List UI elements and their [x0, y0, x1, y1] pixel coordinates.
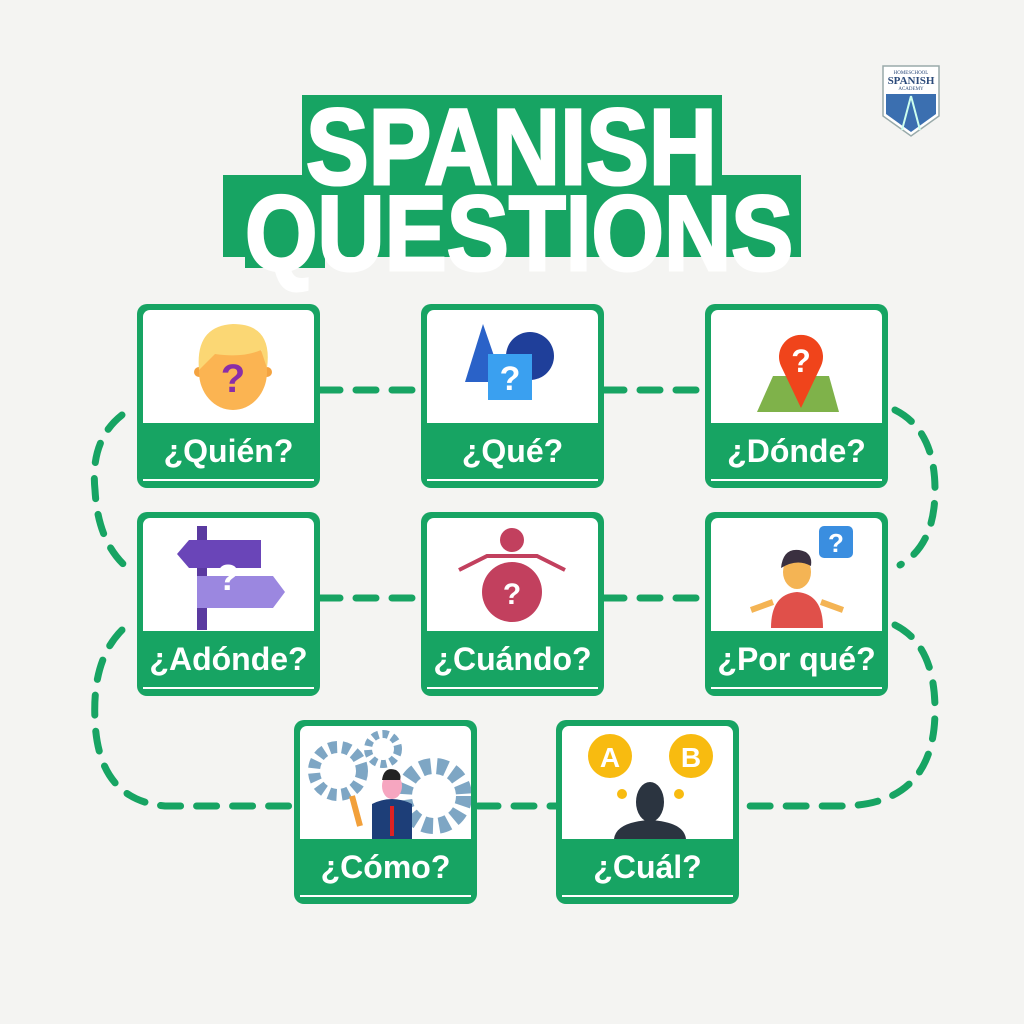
logo: ACADEMY — [898, 87, 924, 92]
card: Cómo — [294, 720, 477, 904]
card: Quién — [137, 304, 320, 488]
logo: HOMESCHOOL — [894, 71, 928, 76]
card: Cómo: ¿Cómo? — [321, 849, 450, 885]
card: Adónde: ? — [217, 557, 239, 598]
card: Cuándo: ? — [503, 578, 521, 611]
card: Adónde — [137, 512, 320, 696]
card: Cuándo: ¿Cuándo? — [433, 641, 592, 677]
card: Qué: ? — [500, 360, 520, 398]
card: Quién: ¿Quién? — [164, 433, 293, 469]
logo — [882, 65, 940, 137]
card: Por qué: ? — [828, 528, 844, 558]
card: Cuál — [556, 720, 739, 904]
title: SPANISH — [306, 86, 717, 207]
card: Dónde — [705, 304, 888, 488]
card: Cuál: B — [681, 742, 701, 773]
card: Qué: ¿Qué? — [462, 433, 563, 469]
card: Por qué: ¿Por qué? — [717, 641, 876, 677]
card: Dónde: ¿Dónde? — [727, 433, 866, 469]
card: Quién: ? — [221, 357, 245, 401]
title: QUESTIONS — [245, 173, 793, 293]
card: Cuándo — [421, 512, 604, 696]
card: Cuál: A — [600, 742, 620, 773]
logo: SPANISH — [888, 75, 935, 87]
card: Cuál: ¿Cuál? — [593, 849, 702, 885]
card: Dónde: ? — [791, 343, 811, 379]
card: Adónde: ¿Adónde? — [149, 641, 308, 677]
title — [223, 86, 801, 293]
card: Qué — [421, 304, 604, 488]
card: Por qué — [705, 512, 888, 696]
